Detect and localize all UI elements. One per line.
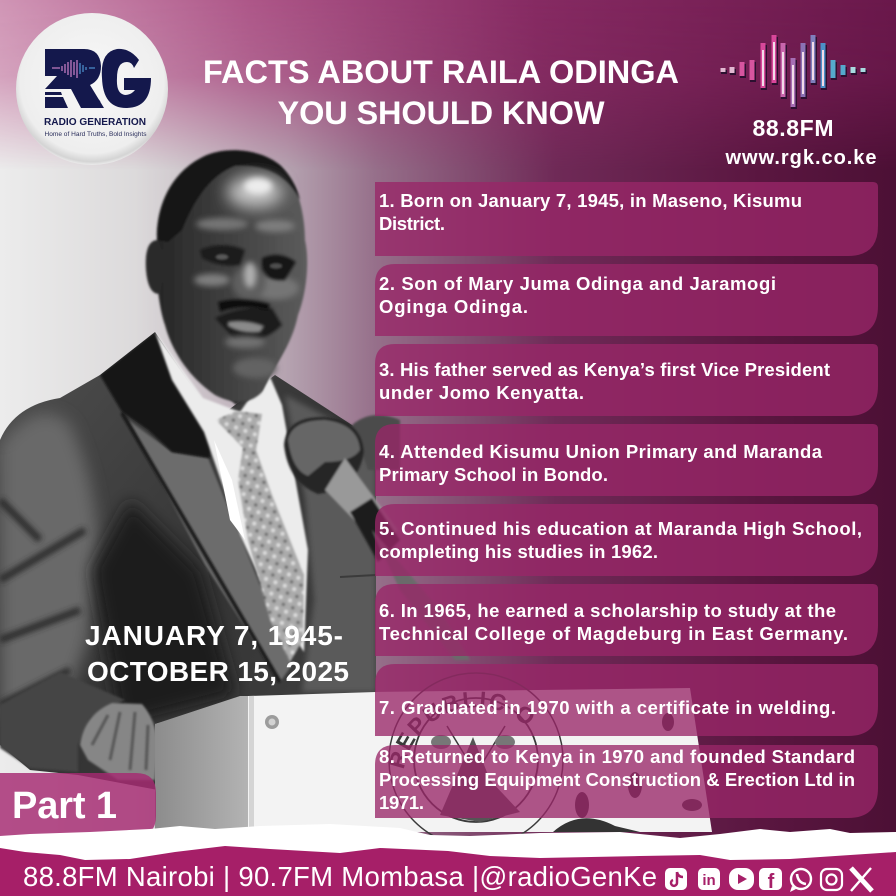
head	[146, 150, 307, 402]
sound wave icon	[723, 35, 864, 109]
card 5	[375, 504, 878, 576]
fact cards and text	[375, 182, 878, 818]
eyes and brows	[200, 245, 245, 266]
photo: Raila Odinga at podium	[0, 148, 712, 836]
station frequency and website: 88.8FM	[752, 115, 834, 141]
icon: linkedin: in	[702, 872, 716, 889]
footer bar	[0, 846, 896, 896]
logo badge	[16, 13, 168, 165]
title: FACTS ABOUT RAILA ODINGA	[203, 54, 679, 90]
icon: facebook: f	[768, 871, 775, 893]
podium: REPUBLIC O	[390, 692, 534, 768]
card 6	[375, 584, 878, 656]
card 8: 1971.	[379, 792, 424, 813]
card 8: 8. Returned to Kenya in 1970 and founded Standard	[379, 746, 855, 767]
card 6: Technical College of Magdeburg in East Germany.	[379, 623, 848, 644]
ear	[146, 240, 165, 294]
card 2: Oginga Odinga.	[379, 296, 528, 317]
icon: youtube	[729, 868, 754, 890]
logo mark RG	[45, 49, 151, 108]
torn paper strip	[0, 824, 896, 896]
station frequency and website	[724, 115, 876, 169]
card 3: under Jomo Kenyatta.	[379, 382, 584, 403]
nose	[232, 266, 266, 300]
card 4: Primary School in Bondo.	[379, 464, 608, 485]
logo badge: RADIO GENERATION	[44, 116, 146, 128]
card 2: 2. Son of Mary Juma Odinga and Jaramogi	[379, 273, 776, 294]
title: YOU SHOULD KNOW	[278, 95, 605, 131]
microphones	[284, 415, 470, 660]
dates: JANUARY 7, 1945-	[85, 620, 343, 651]
icon: whatsapp	[790, 869, 811, 892]
title	[203, 54, 679, 131]
card 6: 6. In 1965, he earned a scholarship to study at the	[379, 600, 836, 621]
shirt	[155, 332, 308, 652]
footer text: 88.8FM Nairobi | 90.7FM Mombasa |@radioGenKe	[23, 861, 657, 892]
necktie	[216, 411, 304, 662]
card 3	[375, 344, 878, 416]
card 7	[375, 664, 878, 736]
card 4: 4. Attended Kisumu Union Primary and Maranda	[379, 441, 823, 462]
logo badge: Home of Hard Truths, Bold Insights	[44, 131, 147, 138]
mouth	[215, 307, 282, 341]
card 7: 7. Graduated in 1970 with a certificate in welding.	[379, 697, 836, 718]
jaw highlight	[233, 358, 277, 378]
icon: tiktok	[665, 868, 687, 890]
icon: X	[851, 868, 872, 891]
card 5: completing his studies in 1962.	[379, 541, 658, 562]
card 4	[375, 424, 878, 496]
card 1: 1. Born on January 7, 1945, in Maseno, Kisumu	[379, 190, 802, 211]
forehead highlights	[227, 176, 283, 208]
left sleeve and hand	[0, 672, 158, 780]
suit jacket	[0, 330, 380, 800]
card 8: Processing Equipment Construction & Erection Ltd in	[379, 769, 855, 790]
station frequency and website: www.rgk.co.ke	[724, 147, 876, 169]
dark collar lapel	[100, 332, 212, 458]
podium	[155, 672, 712, 836]
bar shadows	[724, 37, 864, 109]
dates	[85, 620, 349, 687]
icon: linkedin	[698, 868, 720, 890]
card 8	[375, 745, 878, 818]
card 2	[375, 264, 878, 336]
card 5: 5. Continued his education at Maranda High School,	[379, 518, 862, 539]
card 3: 3. His father served as Kenya’s first Vice President	[379, 359, 830, 380]
card 1	[375, 182, 878, 256]
dates: OCTOBER 15, 2025	[87, 656, 349, 687]
icon: facebook	[759, 868, 782, 893]
icon: instagram	[821, 869, 842, 890]
hair	[157, 150, 300, 242]
podium seal	[389, 673, 563, 847]
card 1: District.	[379, 213, 445, 234]
part label	[0, 773, 156, 836]
neck	[175, 335, 285, 405]
part label: Part 1	[12, 785, 117, 827]
social icons	[665, 868, 872, 893]
